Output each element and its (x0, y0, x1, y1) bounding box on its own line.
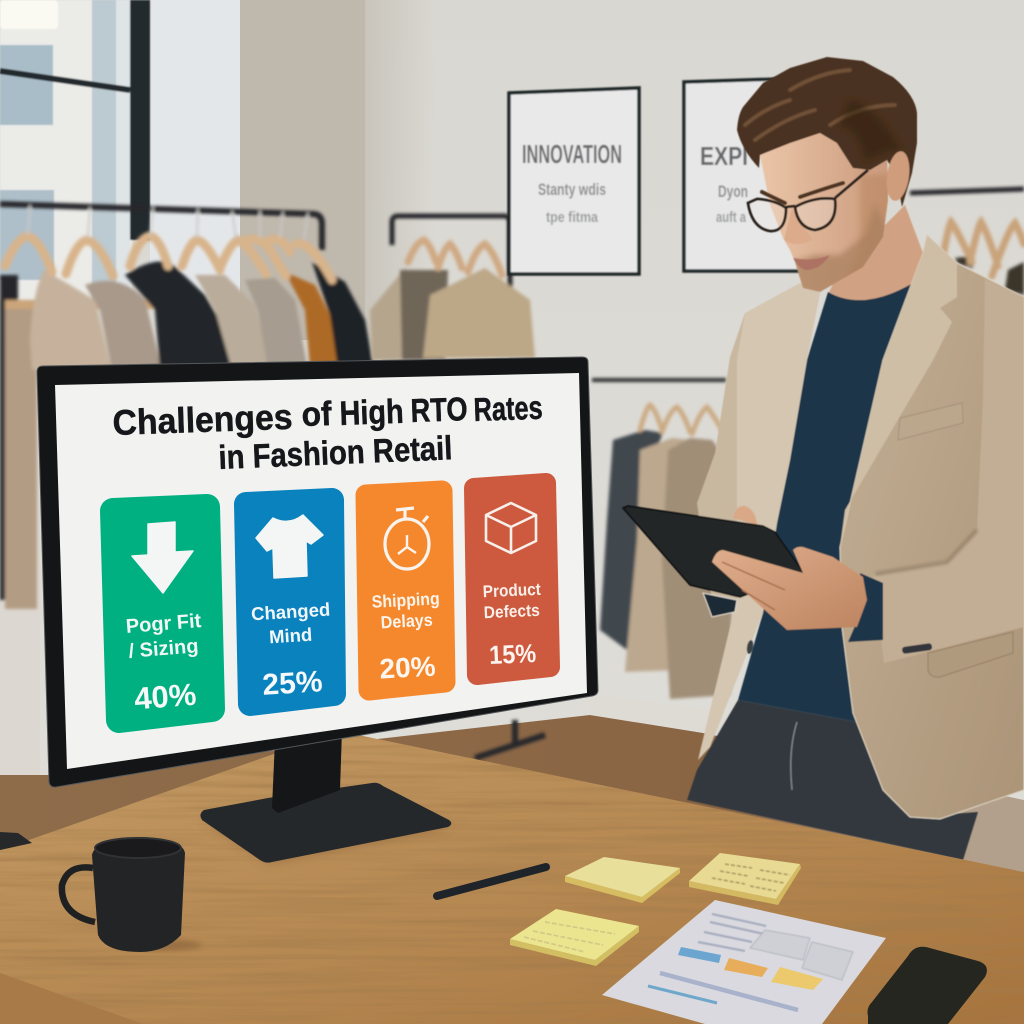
handle (62, 867, 95, 922)
finger lines (722, 562, 785, 610)
desk (0, 731, 1024, 1024)
grey knit (245, 278, 308, 370)
fingers behind tablet (733, 506, 757, 525)
card: product defects 15%: 15% (488, 638, 537, 670)
yellow block (771, 967, 823, 990)
card: product defects 15% (474, 483, 550, 675)
breast pocket (898, 403, 963, 440)
dark jacket (125, 261, 236, 370)
ear (884, 150, 912, 202)
base (200, 783, 451, 863)
shelf bar and dark garment (0, 275, 164, 609)
knit jumper (85, 281, 162, 370)
icon: down arrow (132, 522, 193, 593)
rack foot (475, 720, 545, 758)
monitor (37, 357, 598, 787)
hair highlights (745, 70, 895, 140)
bezel (37, 357, 598, 787)
hair shadow (840, 100, 900, 160)
stubble (795, 209, 884, 292)
hangers (640, 405, 722, 434)
sleeve buttons (902, 643, 932, 654)
person (623, 57, 1024, 860)
card: changed mind 25%: 25% (261, 665, 323, 702)
title (112, 389, 543, 477)
wood grain (0, 736, 868, 1006)
rim (95, 838, 181, 858)
floor (0, 693, 1024, 900)
card: shipping delays 20%: Delays (380, 610, 433, 632)
card: poor fit / sizing 40% (113, 507, 212, 720)
card: shipping delays 20% (366, 491, 445, 690)
poster: innovation: tpe fitma (546, 209, 599, 226)
office chair edge (0, 832, 32, 850)
pen (437, 867, 546, 896)
cheek and neck shadow (859, 174, 888, 239)
beige shirt (195, 275, 272, 370)
coffee mug (62, 837, 202, 952)
title: Challenges (112, 397, 293, 443)
sleeve crease shadow (875, 530, 977, 574)
document on desk (602, 900, 886, 1024)
tablet (623, 506, 804, 597)
card: changed mind 25% (246, 500, 334, 704)
flap pocket (928, 632, 1013, 677)
card: shipping delays 20%: 20% (379, 651, 436, 684)
lips (793, 255, 830, 270)
neck (828, 205, 923, 301)
eyebrows (762, 183, 843, 203)
poster: innovation: Stanty wdis (538, 180, 606, 199)
sticky note: written (689, 853, 801, 905)
beige jacket (30, 270, 112, 370)
hair (737, 57, 917, 207)
window (0, 0, 150, 300)
title: Rates (473, 389, 543, 428)
poster: expert: Dyon (718, 182, 748, 201)
title: of (301, 395, 333, 434)
monitor stand (200, 730, 451, 863)
card: poor fit / sizing 40%: / Sizing (128, 635, 199, 663)
trouser seam (791, 722, 797, 790)
card: changed mind 25%: Changed (250, 599, 331, 624)
garments (370, 268, 425, 360)
poster: innovation: INNOVATION (522, 139, 622, 169)
cuff (848, 573, 883, 642)
clothing rack left (0, 204, 374, 609)
rail (0, 204, 322, 250)
orange shirt (285, 272, 340, 370)
neck (272, 730, 342, 813)
wooden hangers (5, 236, 332, 280)
mug shadow (118, 939, 202, 951)
icon: stopwatch (385, 508, 429, 569)
table sketch (750, 930, 853, 980)
jacket button (746, 640, 754, 654)
hanger hooks (28, 205, 308, 240)
hand (712, 547, 867, 630)
blue block (678, 947, 721, 963)
poster: expert: EXPI (700, 141, 748, 171)
blazer left sleeve (697, 313, 760, 600)
card: product defects 15%: Defects (483, 601, 540, 622)
poster: expert: auft a (716, 209, 746, 226)
face (759, 132, 889, 292)
beige coat (625, 438, 690, 672)
poster: expert (684, 78, 810, 271)
card: poor fit / sizing 40%: 40% (133, 677, 197, 716)
blazer right sleeve (873, 279, 1024, 663)
title: High (339, 393, 404, 433)
poster: innovation (509, 88, 639, 274)
clothing rack top right (910, 189, 1024, 295)
shadow under stand (211, 826, 440, 865)
glasses (748, 170, 868, 231)
card: shipping delays 20%: Shipping (371, 588, 440, 612)
shirt cuff under tablet (703, 593, 737, 617)
rail frame (392, 216, 510, 355)
trousers (687, 700, 978, 860)
blazer left front (698, 283, 820, 760)
screen (55, 373, 587, 769)
title: RTO (410, 390, 468, 429)
desk front edge (0, 973, 143, 1024)
orange block (724, 958, 768, 977)
nose shadow (784, 208, 813, 244)
smartphone (868, 947, 987, 1024)
long line (660, 973, 798, 1010)
taupe coat (662, 438, 735, 699)
card: poor fit / sizing 40%: Pogr Fit (125, 610, 202, 638)
black shirt (312, 262, 374, 370)
card: changed mind 25%: Mind (268, 624, 313, 647)
sticky note: faint writing (510, 909, 639, 966)
card: product defects 15%: Product (482, 580, 541, 601)
faint text lines (698, 914, 766, 951)
dark grey coat (600, 430, 663, 650)
icon: t-shirt (256, 515, 323, 578)
lapel (840, 235, 957, 547)
icon: box (486, 503, 536, 553)
clothing rack centre (370, 216, 535, 360)
sticky note: blank (565, 857, 680, 903)
sweater (738, 283, 925, 722)
hangers (408, 240, 502, 275)
blazer right body (840, 235, 1024, 819)
clothing rack right of monitor (475, 380, 735, 758)
blue line (648, 986, 717, 1003)
title: in Fashion Retail (218, 430, 453, 477)
body (92, 837, 185, 952)
